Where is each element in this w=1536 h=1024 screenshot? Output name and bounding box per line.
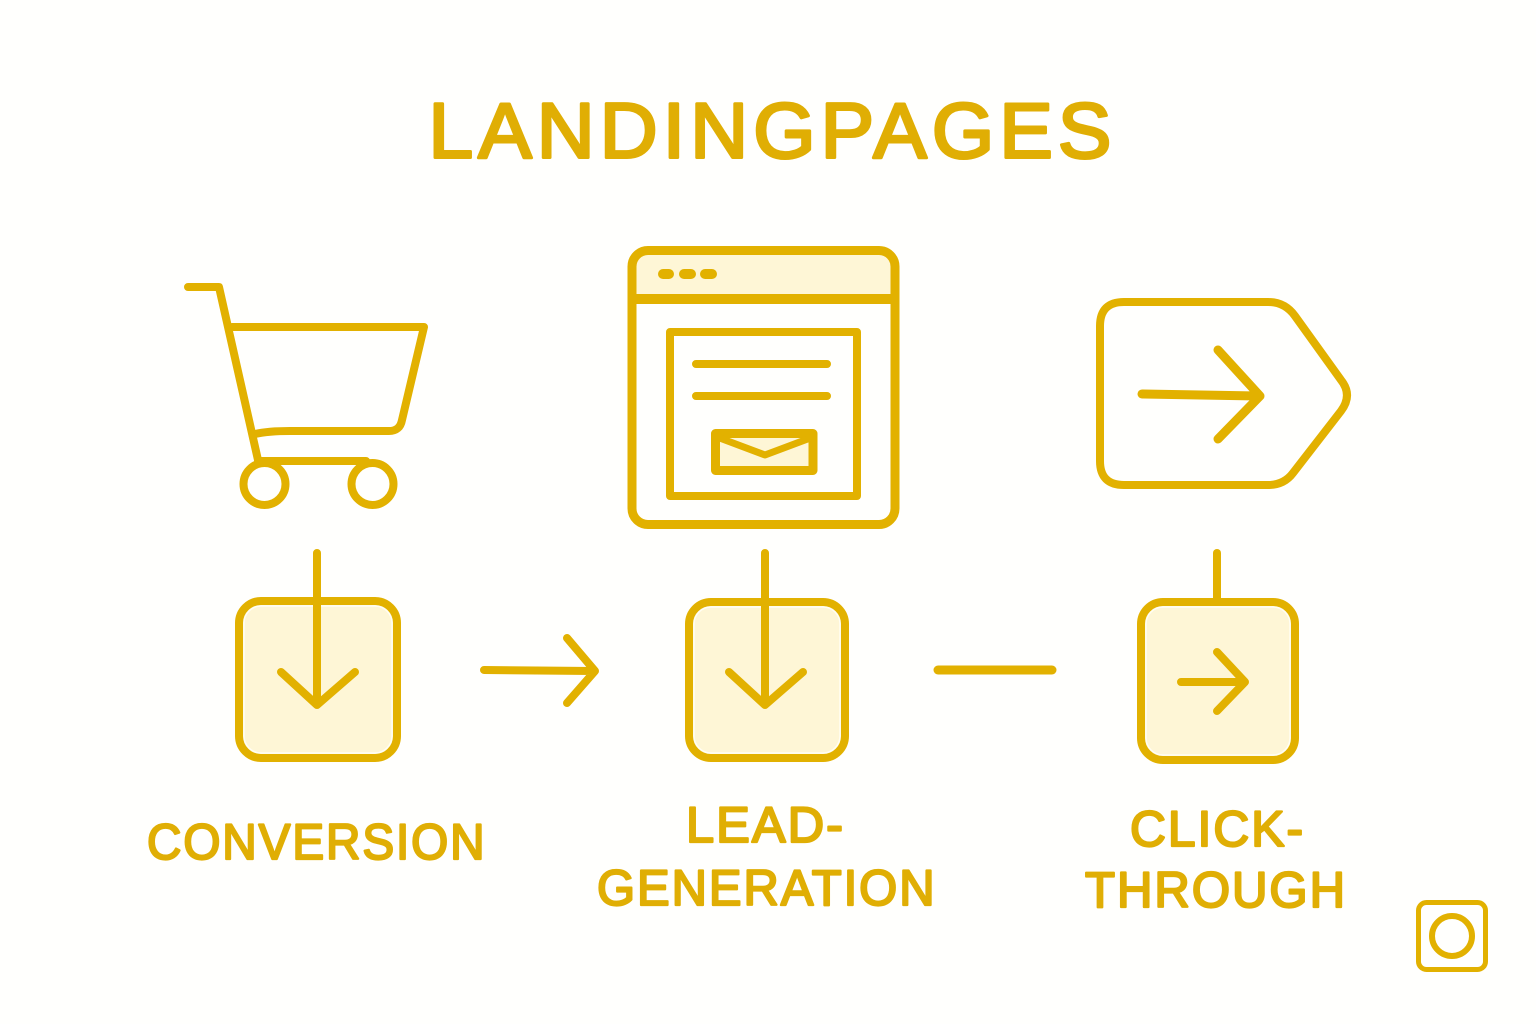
label: click-through: THROUGH (1085, 862, 1347, 918)
label: lead-generation: LEAD- (686, 797, 845, 853)
label: lead-generation: GENERATION (597, 860, 936, 916)
label: lead-generation (597, 797, 936, 916)
connector line: lead-generation to click-through (938, 666, 1052, 674)
step box: conversion (239, 553, 397, 758)
icon: landing page browser window (632, 250, 895, 524)
label: conversion: CONVERSION (147, 814, 486, 870)
title: LANDINGPAGES (428, 86, 1116, 174)
icon: shopping cart (188, 287, 424, 505)
arrow: conversion to lead-generation (484, 638, 595, 703)
step box: click-through (1141, 553, 1295, 760)
step box: lead-generation (689, 553, 845, 758)
label: click-through (1085, 801, 1347, 918)
label: click-through: CLICK- (1130, 801, 1305, 857)
icon: click-through tag arrow (1100, 302, 1347, 485)
icon: corner badge (1418, 902, 1486, 970)
